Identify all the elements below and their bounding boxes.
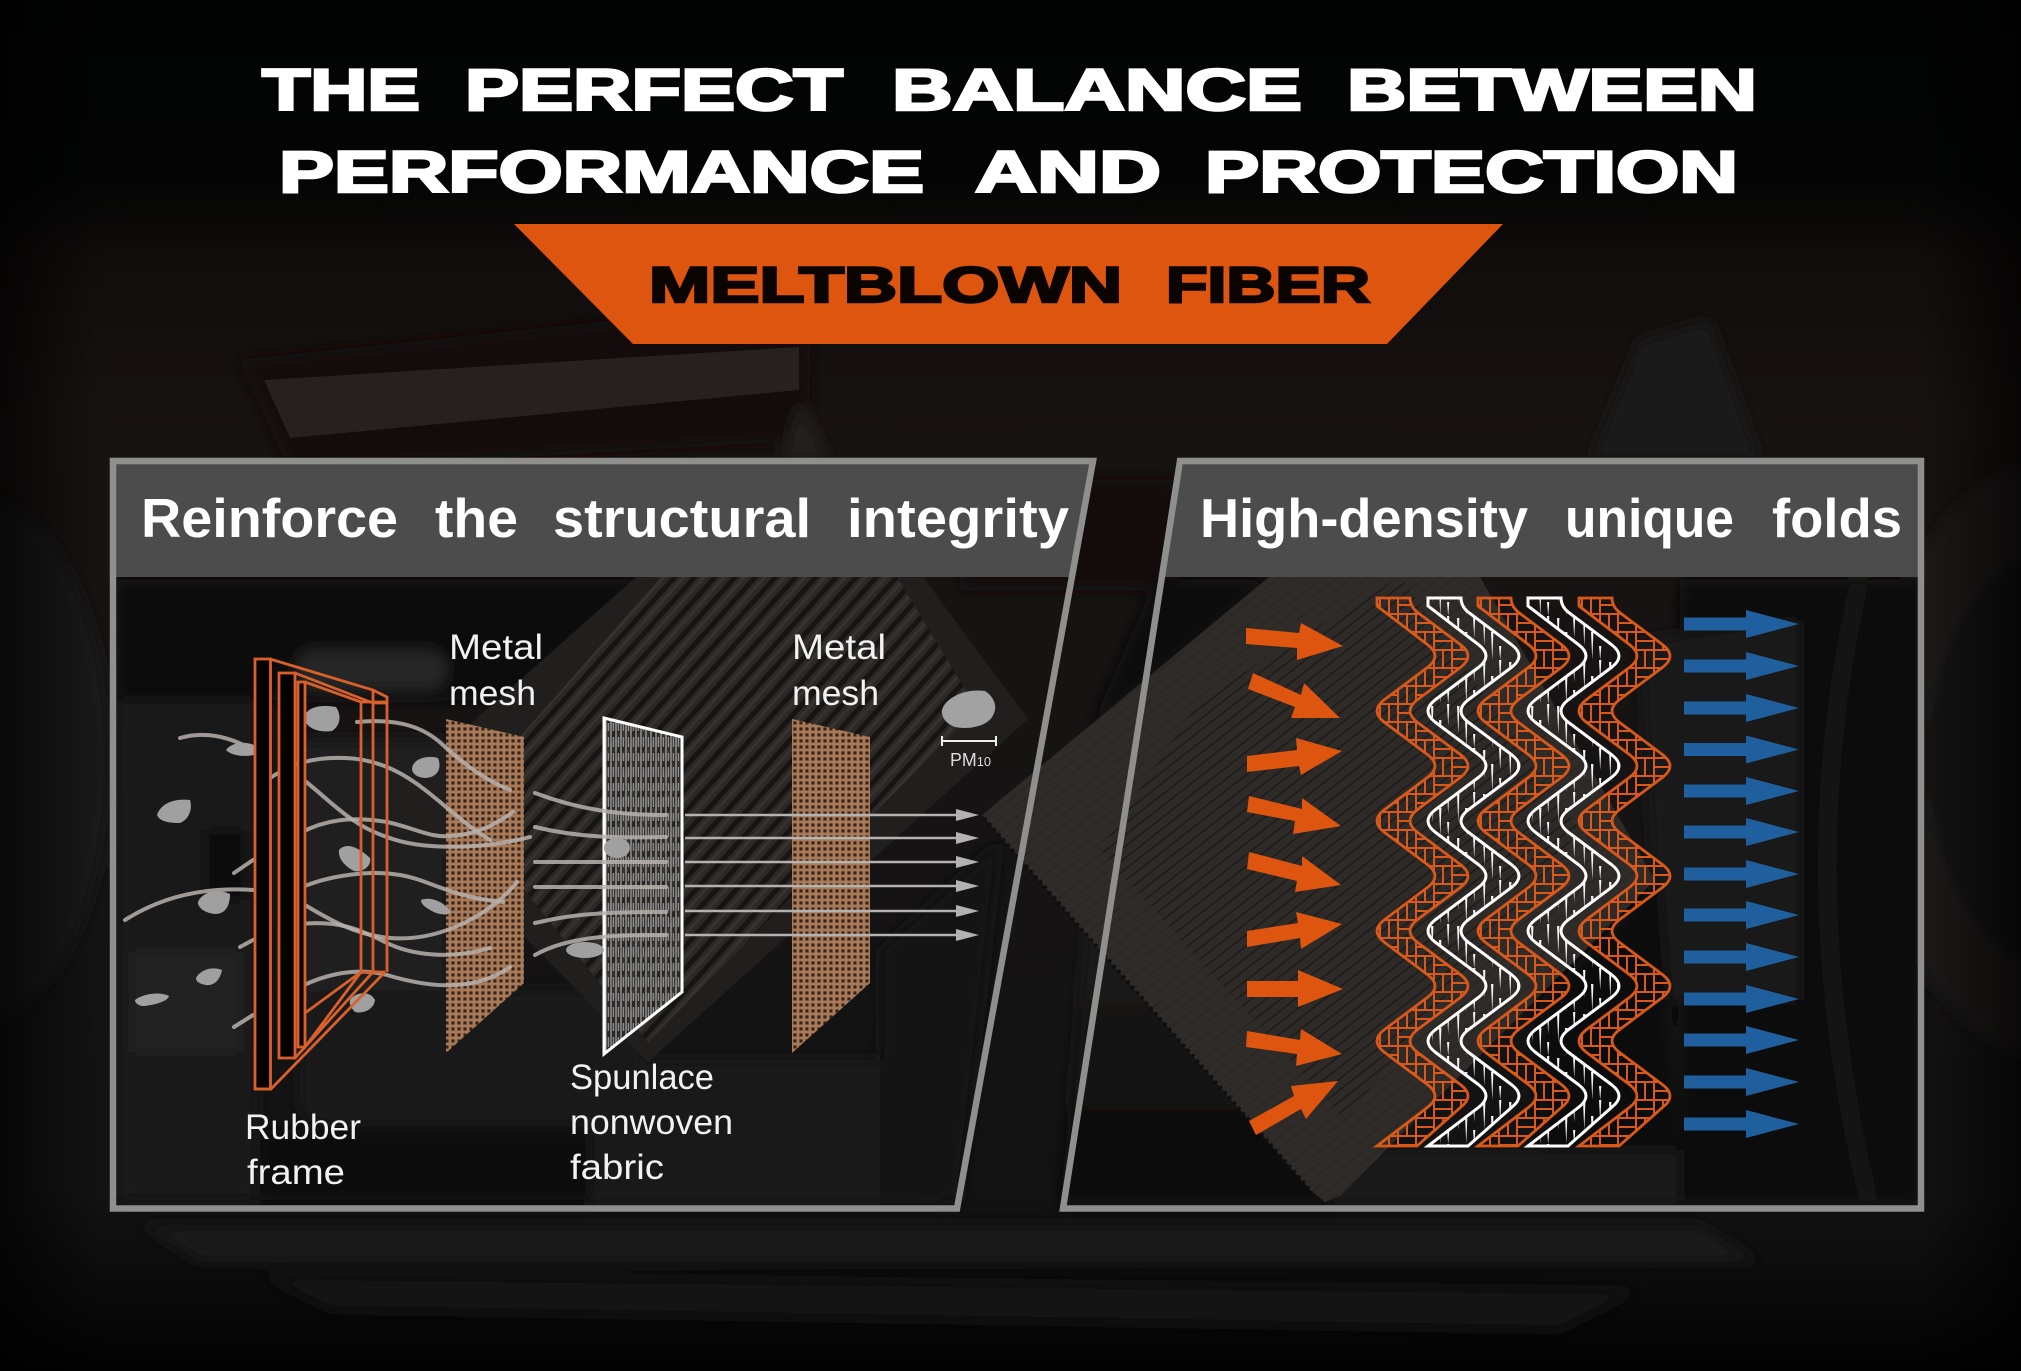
badge: meltblown fiber: MELTBLOWN — [649, 257, 1122, 313]
orange inlet arrows — [1246, 623, 1343, 1135]
label: rubber frame: Rubber — [245, 1108, 361, 1147]
label: spunlace nonwoven fabric: Spunlace — [570, 1058, 714, 1097]
pleated fold layers — [1377, 598, 1670, 1146]
title: BALANCE — [892, 58, 1302, 123]
panel header right — [1161, 464, 1918, 577]
panel: reinforce the structural integrity — [113, 461, 1093, 1208]
title: AND — [975, 140, 1161, 205]
title: THE — [262, 58, 420, 123]
panel header left: integrity — [847, 487, 1069, 549]
tray silhouette — [264, 347, 799, 438]
label: metal mesh 1 — [449, 628, 543, 713]
panel header left: structural — [553, 487, 811, 549]
background filter photo, left (carbon pleats) — [387, 577, 1028, 1062]
panel header right: High-density — [1200, 487, 1528, 549]
label: rubber frame — [245, 1108, 361, 1192]
panel header left: Reinforce — [141, 487, 398, 549]
label: spunlace nonwoven fabric: fabric — [570, 1148, 664, 1187]
label: metal mesh 2: mesh — [792, 674, 879, 713]
air wisps — [125, 721, 666, 1027]
dust particles — [135, 706, 630, 1012]
rubber frame — [255, 659, 387, 1089]
label: rubber frame: frame — [247, 1153, 345, 1192]
panel header left: the — [435, 487, 518, 549]
label: metal mesh 1: mesh — [449, 674, 536, 713]
badge: meltblown fiber: FIBER — [1166, 257, 1370, 313]
title — [262, 58, 1757, 205]
airflow arrows — [685, 809, 979, 941]
panel header right: unique — [1565, 487, 1734, 549]
title: PROTECTION — [1205, 140, 1738, 205]
title: BETWEEN — [1347, 58, 1757, 123]
label: spunlace nonwoven fabric — [570, 1058, 733, 1187]
spunlace nonwoven fabric — [604, 718, 682, 1054]
metal mesh 2 — [792, 719, 870, 1053]
label: spunlace nonwoven fabric: nonwoven — [570, 1103, 733, 1142]
title: PERFECT — [465, 58, 843, 123]
panel header left — [116, 464, 1090, 577]
background filter photo, right (pleated) — [982, 577, 1655, 1202]
panel header right: folds — [1772, 487, 1902, 549]
label: metal mesh 2 — [792, 628, 886, 713]
metal mesh 1 — [446, 719, 524, 1053]
label: metal mesh 2: Metal — [792, 628, 886, 667]
title: PERFORMANCE — [279, 140, 924, 205]
PM10 scale: PM10 — [950, 750, 991, 770]
PM10 scale — [942, 690, 996, 770]
blue outlet arrows — [1684, 610, 1799, 1138]
panel: high-density unique folds — [1063, 461, 1921, 1208]
badge: meltblown fiber — [514, 224, 1503, 344]
label: metal mesh 1: Metal — [449, 628, 543, 667]
